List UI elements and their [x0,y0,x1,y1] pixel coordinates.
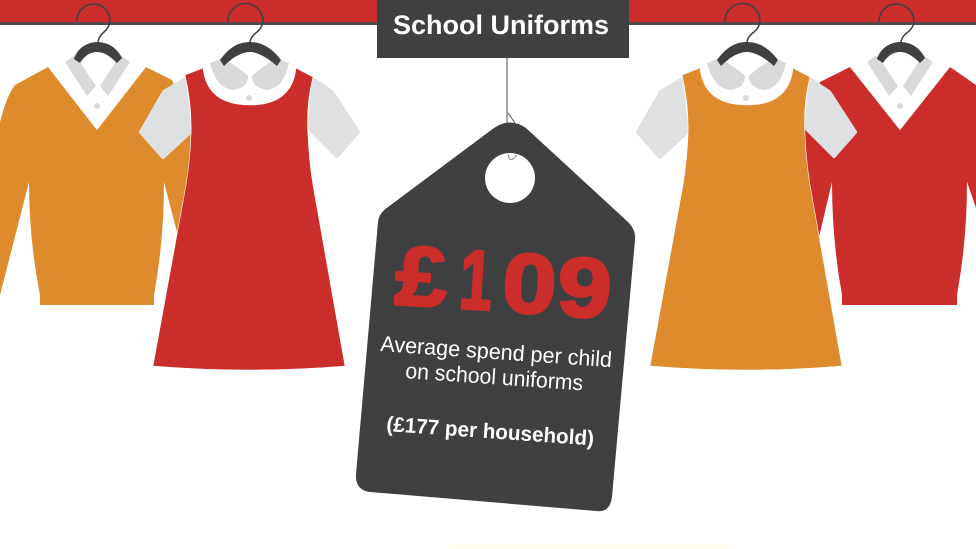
price figure: 1 [457,233,495,328]
hanger: sweater left [74,4,122,63]
price figure: 0 [500,236,559,333]
garment: orange dress [638,58,855,370]
caption: on school uniforms [405,358,584,395]
garment: red sweater [800,52,976,305]
caption: Average spend per child [380,331,613,372]
clothes rail [0,0,976,25]
caption [380,331,613,450]
tag string [507,58,515,124]
garment: red dress [141,58,358,370]
price tag [356,122,635,511]
hanger: orange dress [717,3,778,66]
title banner [377,0,629,58]
hanger: red dress [220,3,281,66]
faint cropped text at bottom edge [450,544,730,549]
price figure: £ [393,228,450,325]
caption: (£177 per household) [386,413,595,450]
hanger: red sweater [877,4,925,63]
title banner: School Uniforms [393,10,609,40]
price figure [393,228,614,337]
garment: orange sweater [0,52,195,305]
price figure: 9 [555,240,614,337]
